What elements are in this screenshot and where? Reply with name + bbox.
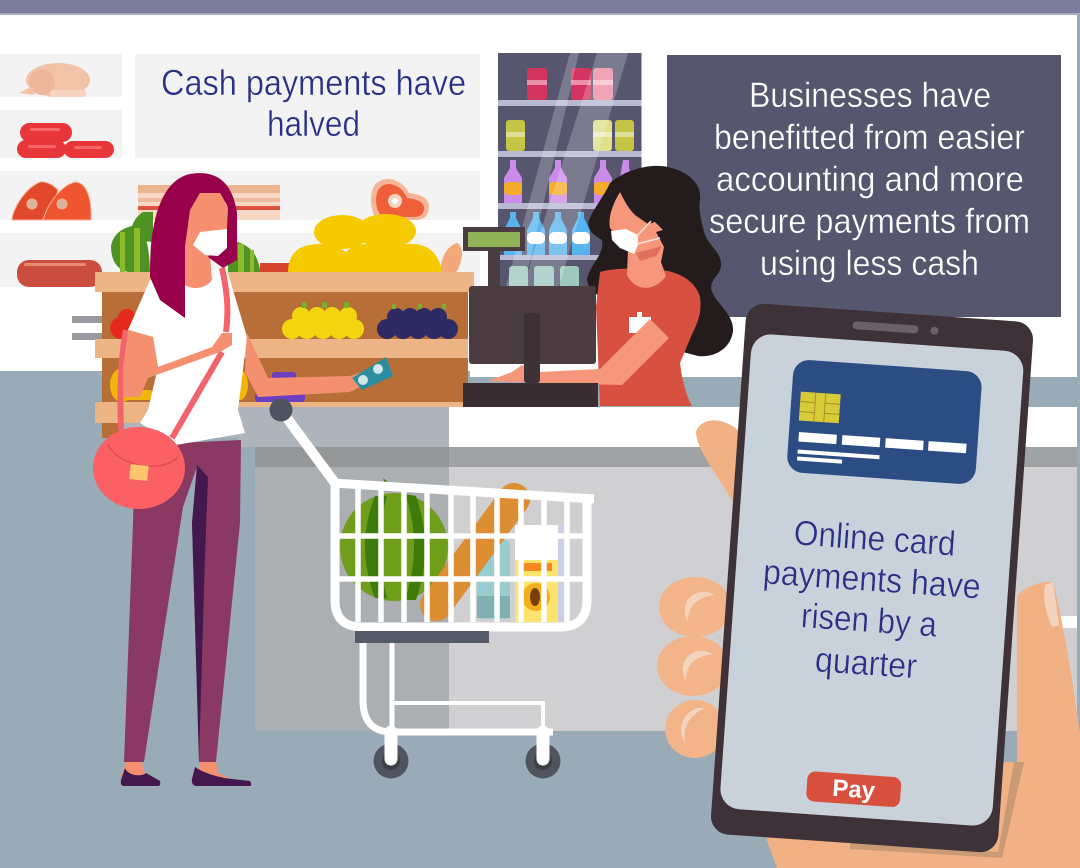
- panel: businesses have benefitted: benefitted from easier: [714, 118, 1025, 157]
- crate shelf boards: [95, 339, 468, 438]
- bag strap: [121, 268, 227, 438]
- panel: businesses have benefitted: [667, 55, 1061, 317]
- cart handle: [281, 410, 335, 483]
- customer mask: [193, 229, 227, 256]
- icon: bank card: [786, 359, 983, 485]
- customer neck and face: [185, 193, 229, 288]
- shopping cart: [270, 398, 594, 778]
- cashier shirt: [596, 269, 701, 406]
- cash register display: [463, 227, 525, 287]
- icon: steaks: [12, 182, 91, 220]
- icon: ham slice: [371, 179, 429, 220]
- produce on top of crate: [111, 212, 462, 272]
- panel: businesses have benefitted: secure payments from: [709, 202, 1030, 241]
- panel: cash payments have halved: [135, 54, 480, 158]
- phone speaker and camera: [852, 321, 939, 335]
- cashier neck and face: [609, 192, 666, 288]
- customer right arm: [245, 333, 362, 397]
- pay button: Pay: [831, 775, 877, 805]
- icon: large sausage: [17, 260, 102, 287]
- panel: businesses have benefitted: Businesses have: [749, 76, 991, 115]
- panel: cash payments have halved: Cash payments have: [161, 62, 466, 103]
- wooden crate: [95, 272, 474, 438]
- online card payments text: risen by a: [800, 596, 939, 645]
- pay button: [806, 771, 902, 807]
- cashier hair: [587, 166, 733, 356]
- panel: businesses have benefitted: accounting and more: [716, 160, 1024, 199]
- customer: [93, 173, 393, 786]
- phone screen: [719, 333, 1025, 827]
- checkout counter: [238, 407, 1077, 731]
- cashier arm: [488, 319, 669, 385]
- crate produce: [110, 302, 458, 402]
- customer shirt: [128, 268, 247, 445]
- cart wheels: [374, 732, 560, 778]
- fridge with drinks: [498, 53, 642, 293]
- thumb tip behind phone: [696, 420, 740, 505]
- online card payments text: payments have: [762, 552, 982, 607]
- cashier: [488, 166, 733, 406]
- shelf panels: [0, 54, 480, 287]
- panel: businesses have benefitted: using less cash: [760, 244, 979, 283]
- yellow pears: [282, 307, 364, 339]
- icon: red sausages: [17, 123, 114, 158]
- fingers: [657, 577, 731, 758]
- online card payments text: quarter: [814, 640, 919, 686]
- palm and right thumb: [766, 582, 1080, 868]
- icon: chicken: [19, 63, 90, 97]
- hand behind phone: [696, 420, 1080, 868]
- cart contents: [340, 478, 566, 622]
- cashier mask: [611, 221, 660, 254]
- cart basket: [332, 482, 594, 627]
- icon: bacon: [138, 185, 280, 220]
- cart frame: [363, 643, 553, 732]
- panel: cash payments have halved: halved: [267, 103, 360, 144]
- customer shoes: [121, 762, 251, 786]
- online card payments text: Online card: [793, 513, 957, 564]
- small grey shelf bars: [72, 316, 102, 340]
- customer trousers: [124, 440, 241, 762]
- cash register: [463, 286, 598, 407]
- phone: [710, 303, 1034, 853]
- icon: payment card in hand: [352, 357, 393, 390]
- customer left arm: [123, 330, 232, 397]
- cashier badge: [629, 312, 651, 333]
- plums: [377, 308, 458, 339]
- customer bag: [93, 427, 185, 509]
- customer hair: [150, 173, 237, 318]
- online card payments text: [756, 512, 985, 690]
